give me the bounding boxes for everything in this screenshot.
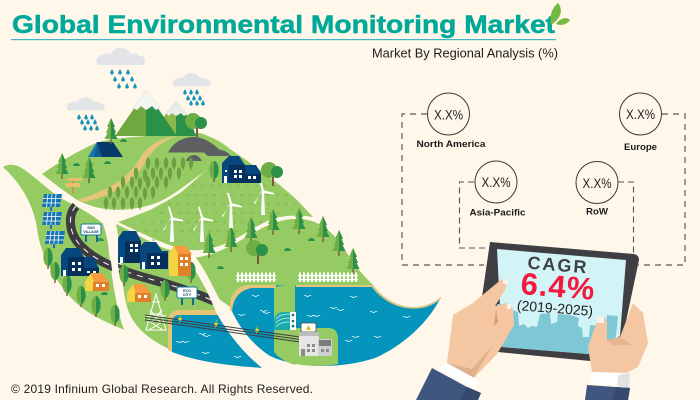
field grass marks [136, 186, 296, 240]
middle leaf green [116, 224, 265, 368]
right cuff [590, 372, 630, 388]
CAGR value: 6.4% [519, 266, 597, 307]
North America marker: North America [416, 139, 486, 150]
sign: sun village [81, 224, 101, 242]
tablet body [482, 242, 639, 361]
farm rows [104, 157, 193, 210]
Europe marker: X.X% [626, 106, 655, 122]
power tower [146, 294, 166, 330]
rain clouds [67, 48, 211, 131]
city skyline [497, 304, 618, 354]
right sleeve [585, 385, 630, 400]
forecast period: (2019-2025) [516, 297, 594, 319]
small bushes [73, 139, 315, 295]
gray mound [168, 137, 231, 161]
tent [88, 142, 123, 157]
North America marker [416, 93, 486, 150]
round trees [43, 113, 283, 326]
RoW marker: X.X% [582, 175, 612, 191]
beige trail [77, 136, 177, 202]
inner dashed connector [460, 182, 634, 253]
sign: eco city: CITY [183, 293, 192, 297]
Asia-Pacific marker: Asia-Pacific [470, 208, 526, 218]
tablet with CAGR [416, 242, 648, 400]
signpost [65, 178, 83, 194]
icon: title leaves [550, 3, 570, 25]
left hand [447, 279, 514, 380]
conifer trees [56, 118, 360, 274]
Europe marker [620, 93, 662, 153]
houses: eco city [118, 231, 168, 269]
power station [299, 323, 332, 356]
left lake [172, 315, 265, 368]
orange house mid [85, 273, 109, 291]
right hand [588, 303, 648, 378]
houses: farm [222, 156, 261, 183]
upper field green [118, 149, 313, 250]
copyright footer: © 2019 Infinium Global Research. All Rights Reserved. [11, 382, 313, 396]
orange house lower [127, 284, 151, 302]
solar panels [42, 194, 65, 248]
building island [295, 328, 338, 366]
cream path over road [103, 224, 140, 331]
dam [274, 312, 296, 330]
right lake [230, 285, 441, 366]
subtitle: Market By Regional Analysis (%) [372, 46, 558, 60]
Asia-Pacific marker [470, 161, 526, 218]
left lake shore [168, 310, 220, 352]
RoW marker: RoW [586, 206, 608, 218]
title: Global Environmental Monitoring Market [12, 11, 556, 39]
outer dashed connector [402, 114, 685, 265]
sign: eco city: ECO [183, 289, 191, 293]
road [70, 206, 214, 301]
CAGR label: CAGR [527, 253, 589, 277]
Europe marker: Europe [624, 142, 657, 153]
houses: sun village [61, 248, 99, 276]
RoW marker [576, 162, 618, 218]
left cuff [438, 363, 478, 390]
power lines [145, 314, 300, 342]
leaf landscape illustration [3, 48, 441, 368]
lower right hill green [192, 219, 373, 310]
sign: sun village: SUN [87, 226, 95, 230]
cream path right [184, 253, 268, 368]
fences [236, 272, 358, 282]
sign: eco city [177, 287, 197, 305]
top hill green [42, 133, 230, 210]
tablet screen [497, 249, 626, 354]
sign: sun village: VILLAGE [83, 230, 99, 234]
wind turbines [163, 180, 274, 242]
regional analysis diagram [402, 93, 685, 265]
left sleeve [416, 368, 481, 400]
waves [176, 295, 410, 358]
orange house large [169, 246, 192, 276]
North America marker: X.X% [434, 106, 463, 122]
green causeway [274, 285, 295, 365]
mountains [115, 91, 196, 136]
left leaf green [3, 165, 125, 330]
Asia-Pacific marker: X.X% [482, 174, 510, 190]
right lake shore [230, 285, 441, 312]
